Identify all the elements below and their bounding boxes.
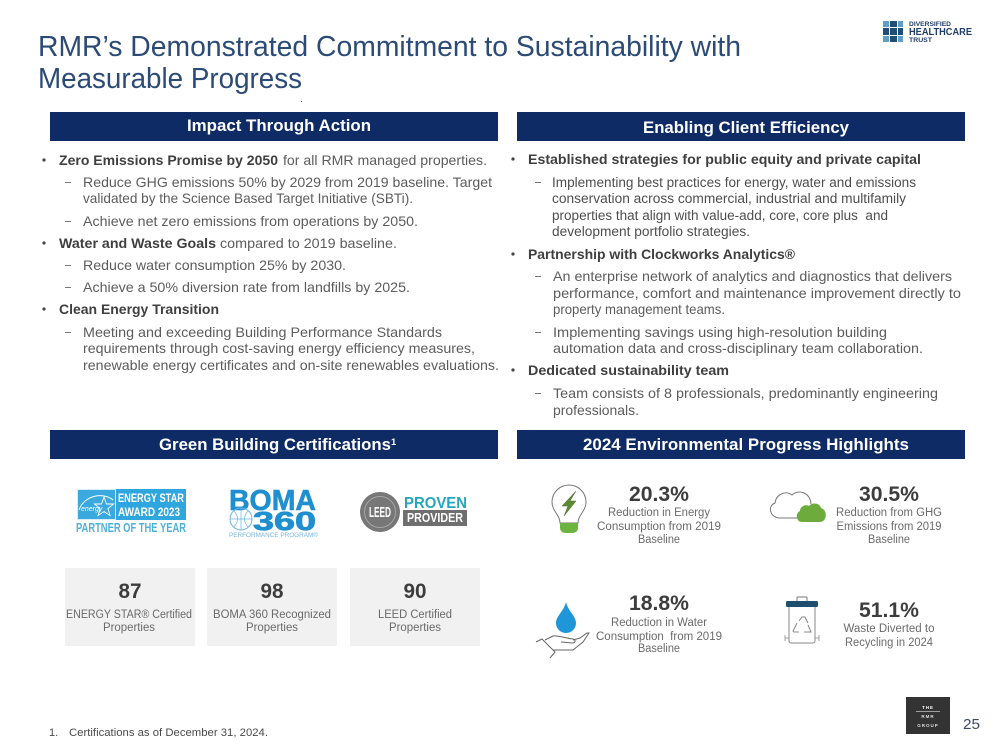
text block: client efficiency bullets: professionals. (553, 402, 639, 418)
text block: client efficiency bullets: Dedicated sustainability team (528, 362, 729, 378)
text block: client efficiency bullets: Implementing best practices for energy, water and emissions (552, 175, 916, 190)
stat card: Energy Star: 87 (118, 580, 142, 603)
text block: impact bullets: Reduce water consumption 25% by 2030. (83, 257, 346, 273)
logo: The RMR Group: RMR (921, 714, 935, 719)
title: Measurable Progress (38, 63, 302, 95)
stat card: BOMA 360 (207, 568, 337, 646)
text block: impact bullets: Meeting and exceeding Building Performance Standards (83, 324, 442, 340)
icon: recycling bin (785, 597, 819, 643)
logo: LEED Proven Provider: PROVEN (404, 495, 467, 512)
text block: client efficiency bullets (511, 151, 961, 418)
heading: Green Building Certifications: 1 (391, 437, 397, 448)
heading: Green Building Certifications: Green Building Certifications (159, 436, 391, 454)
icon: clouds (770, 492, 826, 522)
heading: Green Building Certifications (50, 430, 498, 459)
text block: impact bullets: compared to 2019 baseline. (220, 235, 397, 251)
logo: Energy Star award: ENERGY STAR (118, 491, 184, 505)
heading: Impact Through Action: Impact Through Action (187, 117, 371, 135)
stat: water: Baseline (638, 643, 680, 655)
text block: client efficiency bullets: automation data and cross-disciplinary team collaboration. (553, 340, 923, 356)
text block: impact bullets: requirements through cost-saving energy efficiency measures, (83, 340, 475, 356)
heading: Impact Through Action (50, 112, 498, 141)
stat card: BOMA 360: Properties (246, 622, 298, 634)
stat card: Energy Star (65, 568, 195, 646)
text block: impact bullets: Water and Waste Goals (59, 235, 216, 251)
text block: client efficiency bullets: Implementing savings using high-resolution building (553, 324, 887, 340)
text block: impact bullets: Reduce GHG emissions 50% by 2029 from 2019 baseline. Target (83, 174, 492, 190)
stat: GHG: 30.5% (859, 483, 919, 506)
stat card: BOMA 360: BOMA 360 Recognized (213, 609, 331, 621)
logo: Diversified Healthcare Trust (883, 21, 972, 44)
text block: impact bullets: validated by the Science Based Target Initiative (SBTi). (83, 190, 413, 206)
text block: client efficiency bullets: Team consists of 8 professionals, predominantly engineering (553, 385, 938, 401)
heading: 2024 Environmental Progress Highlights: 2024 Environmental Progress Highlights (583, 436, 909, 454)
stat: energy: 20.3% (629, 483, 689, 506)
stat card: BOMA 360: 98 (260, 580, 284, 603)
logo: BOMA 360 (229, 485, 318, 539)
text block: impact bullets: for all RMR managed properties. (283, 152, 487, 168)
logo: Energy Star award: PARTNER OF THE YEAR (76, 520, 186, 535)
text block: client efficiency bullets: Established strategies for public equity and private capital (528, 151, 921, 167)
stat card: Energy Star: ENERGY STAR® Certified (66, 609, 192, 621)
stat: energy: Reduction in Energy (608, 507, 710, 519)
stat: waste (844, 599, 934, 649)
icon: water drop and hand (536, 602, 589, 658)
logo: The RMR Group: GROUP (917, 723, 939, 728)
stat: waste: Waste Diverted to (844, 623, 934, 635)
stat: energy (597, 483, 721, 546)
text block: impact bullets: Zero Emissions Promise by 2050 (59, 152, 278, 168)
footnote: Certifications as of December 31, 2024. (69, 727, 268, 739)
stat: water: Reduction in Water (611, 617, 707, 629)
stat: water (596, 592, 722, 655)
logo: The RMR Group: THE (922, 705, 934, 710)
page number: 25 (963, 716, 980, 733)
heading: Enabling Client Efficiency: Enabling Client Efficiency (643, 119, 850, 137)
stat: GHG (836, 483, 942, 546)
stat: waste: 51.1% (859, 599, 919, 622)
stat: water: Consumption from 2019 (596, 631, 722, 643)
icon: light bulb (552, 485, 586, 533)
stat card: LEED (350, 568, 480, 646)
heading: Enabling Client Efficiency (517, 112, 965, 141)
logo: LEED Proven Provider: LEED (369, 504, 391, 521)
text block: client efficiency bullets: Partnership with Clockworks Analytics® (528, 246, 796, 262)
logo: Diversified Healthcare Trust: TRUST (909, 37, 932, 44)
text block: client efficiency bullets: conservation across commercial, industrial and multifamily (552, 191, 906, 206)
title: RMR’s Demonstrated Commitment to Sustainability with (38, 31, 741, 63)
text block: impact bullets: renewable energy certificates and on-site renewables evaluations. (83, 357, 499, 373)
text block: client efficiency bullets: An enterprise network of analytics and diagnostics that delivers (553, 268, 952, 284)
title (38, 31, 741, 95)
logo: Energy Star award: AWARD 2023 (118, 505, 180, 519)
logo: LEED Proven Provider (360, 492, 467, 532)
text block: client efficiency bullets: properties that align with value-add, core, core plus and (552, 208, 888, 223)
stat card: LEED: LEED Certified (378, 609, 452, 621)
logo: BOMA 360: PERFORMANCE PROGRAM® (229, 531, 318, 539)
logo: Energy Star award: energy (81, 506, 103, 513)
stat: GHG: Reduction from GHG (836, 507, 942, 519)
footnote: 1. (49, 727, 58, 739)
logo: BOMA 360: 360 (253, 506, 316, 536)
logo: Diversified Healthcare Trust: HEALTHCARE (909, 27, 972, 38)
stat: water: 18.8% (629, 592, 689, 615)
logo: Diversified Healthcare Trust: DIVERSIFIED (909, 21, 951, 28)
stat: energy: Baseline (638, 534, 680, 546)
text block: client efficiency bullets: property management teams. (553, 301, 725, 317)
stat: energy: Consumption from 2019 (597, 521, 721, 533)
stat card: Energy Star: Properties (103, 622, 155, 634)
text block: impact bullets: Achieve a 50% diversion rate from landfills by 2025. (83, 279, 410, 295)
text block: impact bullets: Clean Energy Transition (59, 301, 219, 317)
text block: client efficiency bullets: performance, comfort and maintenance improvement directly to (553, 285, 961, 301)
stat: GHG: Baseline (868, 534, 910, 546)
stat: GHG: Emissions from 2019 (836, 521, 942, 533)
stat card: LEED: Properties (389, 622, 441, 634)
heading: 2024 Environmental Progress Highlights (517, 430, 965, 459)
text block: client efficiency bullets: development portfolio strategies. (552, 224, 750, 239)
stat: waste: Recycling in 2024 (845, 637, 934, 649)
text block: impact bullets: Achieve net zero emissions from operations by 2050. (83, 213, 418, 229)
text block: impact bullets (42, 152, 499, 373)
logo: LEED Proven Provider: PROVIDER (407, 510, 464, 525)
logo: BOMA 360: BOMA (229, 485, 316, 517)
logo: The RMR Group (906, 697, 950, 734)
logo: Energy Star award (76, 489, 186, 535)
stat card: LEED: 90 (404, 580, 426, 603)
